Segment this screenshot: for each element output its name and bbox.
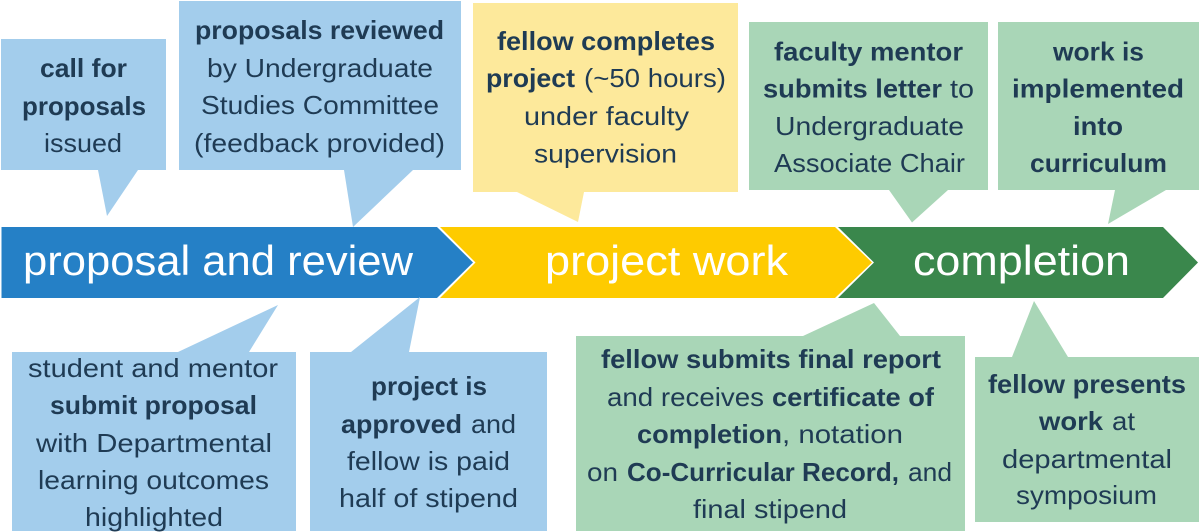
callout: fellow presents work: work [1038, 406, 1104, 436]
callout: student and mentor submit proposal: student and mentor [28, 353, 278, 383]
callout: fellow presents work: departmental [1002, 444, 1172, 474]
callout: fellow presents work: at [1112, 406, 1136, 436]
callout: faculty mentor submits letter: to [950, 74, 974, 104]
callout: fellow completes project: supervision [534, 138, 677, 168]
callout: work is implemented: curriculum [1030, 148, 1167, 178]
callout: work is implemented: work is [1052, 36, 1144, 66]
callout: project is approved: fellow is paid [347, 446, 510, 476]
timeline arrow: proposal and review [2, 227, 473, 298]
callout: fellow submits final report: and [908, 457, 952, 487]
callout: fellow presents work [975, 301, 1199, 522]
callout: student and mentor submit proposal: learning outcomes [38, 465, 269, 495]
callout: faculty mentor submits letter: Undergraduate [775, 111, 964, 141]
callout: project is approved: project is [371, 371, 487, 401]
callout: fellow completes project: (~50 hours) [584, 63, 726, 93]
callout: fellow submits final report: final stipend [693, 494, 847, 524]
callout: proposals reviewed: Studies Committee [201, 90, 439, 120]
callout: fellow submits final report: certificate of [772, 382, 934, 412]
timeline arrow: completion [838, 227, 1198, 298]
callout: fellow submits final report [576, 303, 965, 531]
callout: faculty mentor submits letter: submits letter [763, 74, 942, 104]
callout: project is approved: half of stipend [339, 483, 518, 513]
callout: fellow submits final report: and receives [607, 382, 764, 412]
callout: proposals reviewed: by Undergraduate [207, 53, 433, 83]
callout: fellow completes project: project [486, 63, 575, 93]
callout: fellow presents work: fellow presents [988, 369, 1186, 399]
callout: fellow completes project: under faculty [524, 101, 689, 131]
callout: fellow submits final report: on [587, 457, 618, 487]
callout: project is approved: and [471, 409, 516, 439]
callout: fellow submits final report: Co-Curricular Record, [627, 457, 899, 487]
callout: proposals reviewed [179, 1, 461, 227]
callout: project is approved [310, 297, 547, 531]
timeline arrow: proposal and review: proposal and review [23, 237, 414, 284]
callout: proposals reviewed: (feedback provided) [194, 128, 445, 158]
callout: call for proposals [1, 39, 166, 216]
callout: call for proposals: issued [44, 128, 122, 158]
callout: faculty mentor submits letter: Associate Chair [774, 148, 965, 178]
callout: work is implemented [998, 22, 1199, 224]
callout: fellow submits final report: , notation [782, 419, 903, 449]
callout: work is implemented: into [1073, 111, 1123, 141]
callout: fellow submits final report: completion [637, 419, 782, 449]
timeline arrow: completion: completion [913, 237, 1130, 284]
callout: student and mentor submit proposal [12, 305, 296, 532]
callout: student and mentor submit proposal: highlighted [85, 502, 223, 532]
callout: call for proposals: call for [40, 53, 127, 83]
callout: project is approved: approved [341, 409, 462, 439]
callout: faculty mentor submits letter [749, 22, 988, 222]
callout: student and mentor submit proposal: submit proposal [50, 390, 257, 420]
callout: call for proposals: proposals [22, 91, 146, 121]
callout: proposals reviewed: proposals reviewed [195, 15, 444, 45]
callout: student and mentor submit proposal: with Departmental [35, 428, 272, 458]
callout: fellow submits final report: fellow submits final report [601, 344, 941, 374]
callout: fellow completes project [473, 3, 738, 222]
callout: fellow completes project: fellow completes [497, 26, 715, 56]
callout: fellow presents work: symposium [1016, 480, 1157, 510]
callout: faculty mentor submits letter: faculty mentor [774, 36, 963, 66]
timeline arrow: project work [440, 227, 872, 298]
timeline arrow: project work: project work [545, 237, 789, 284]
callout: work is implemented: implemented [1012, 74, 1184, 104]
